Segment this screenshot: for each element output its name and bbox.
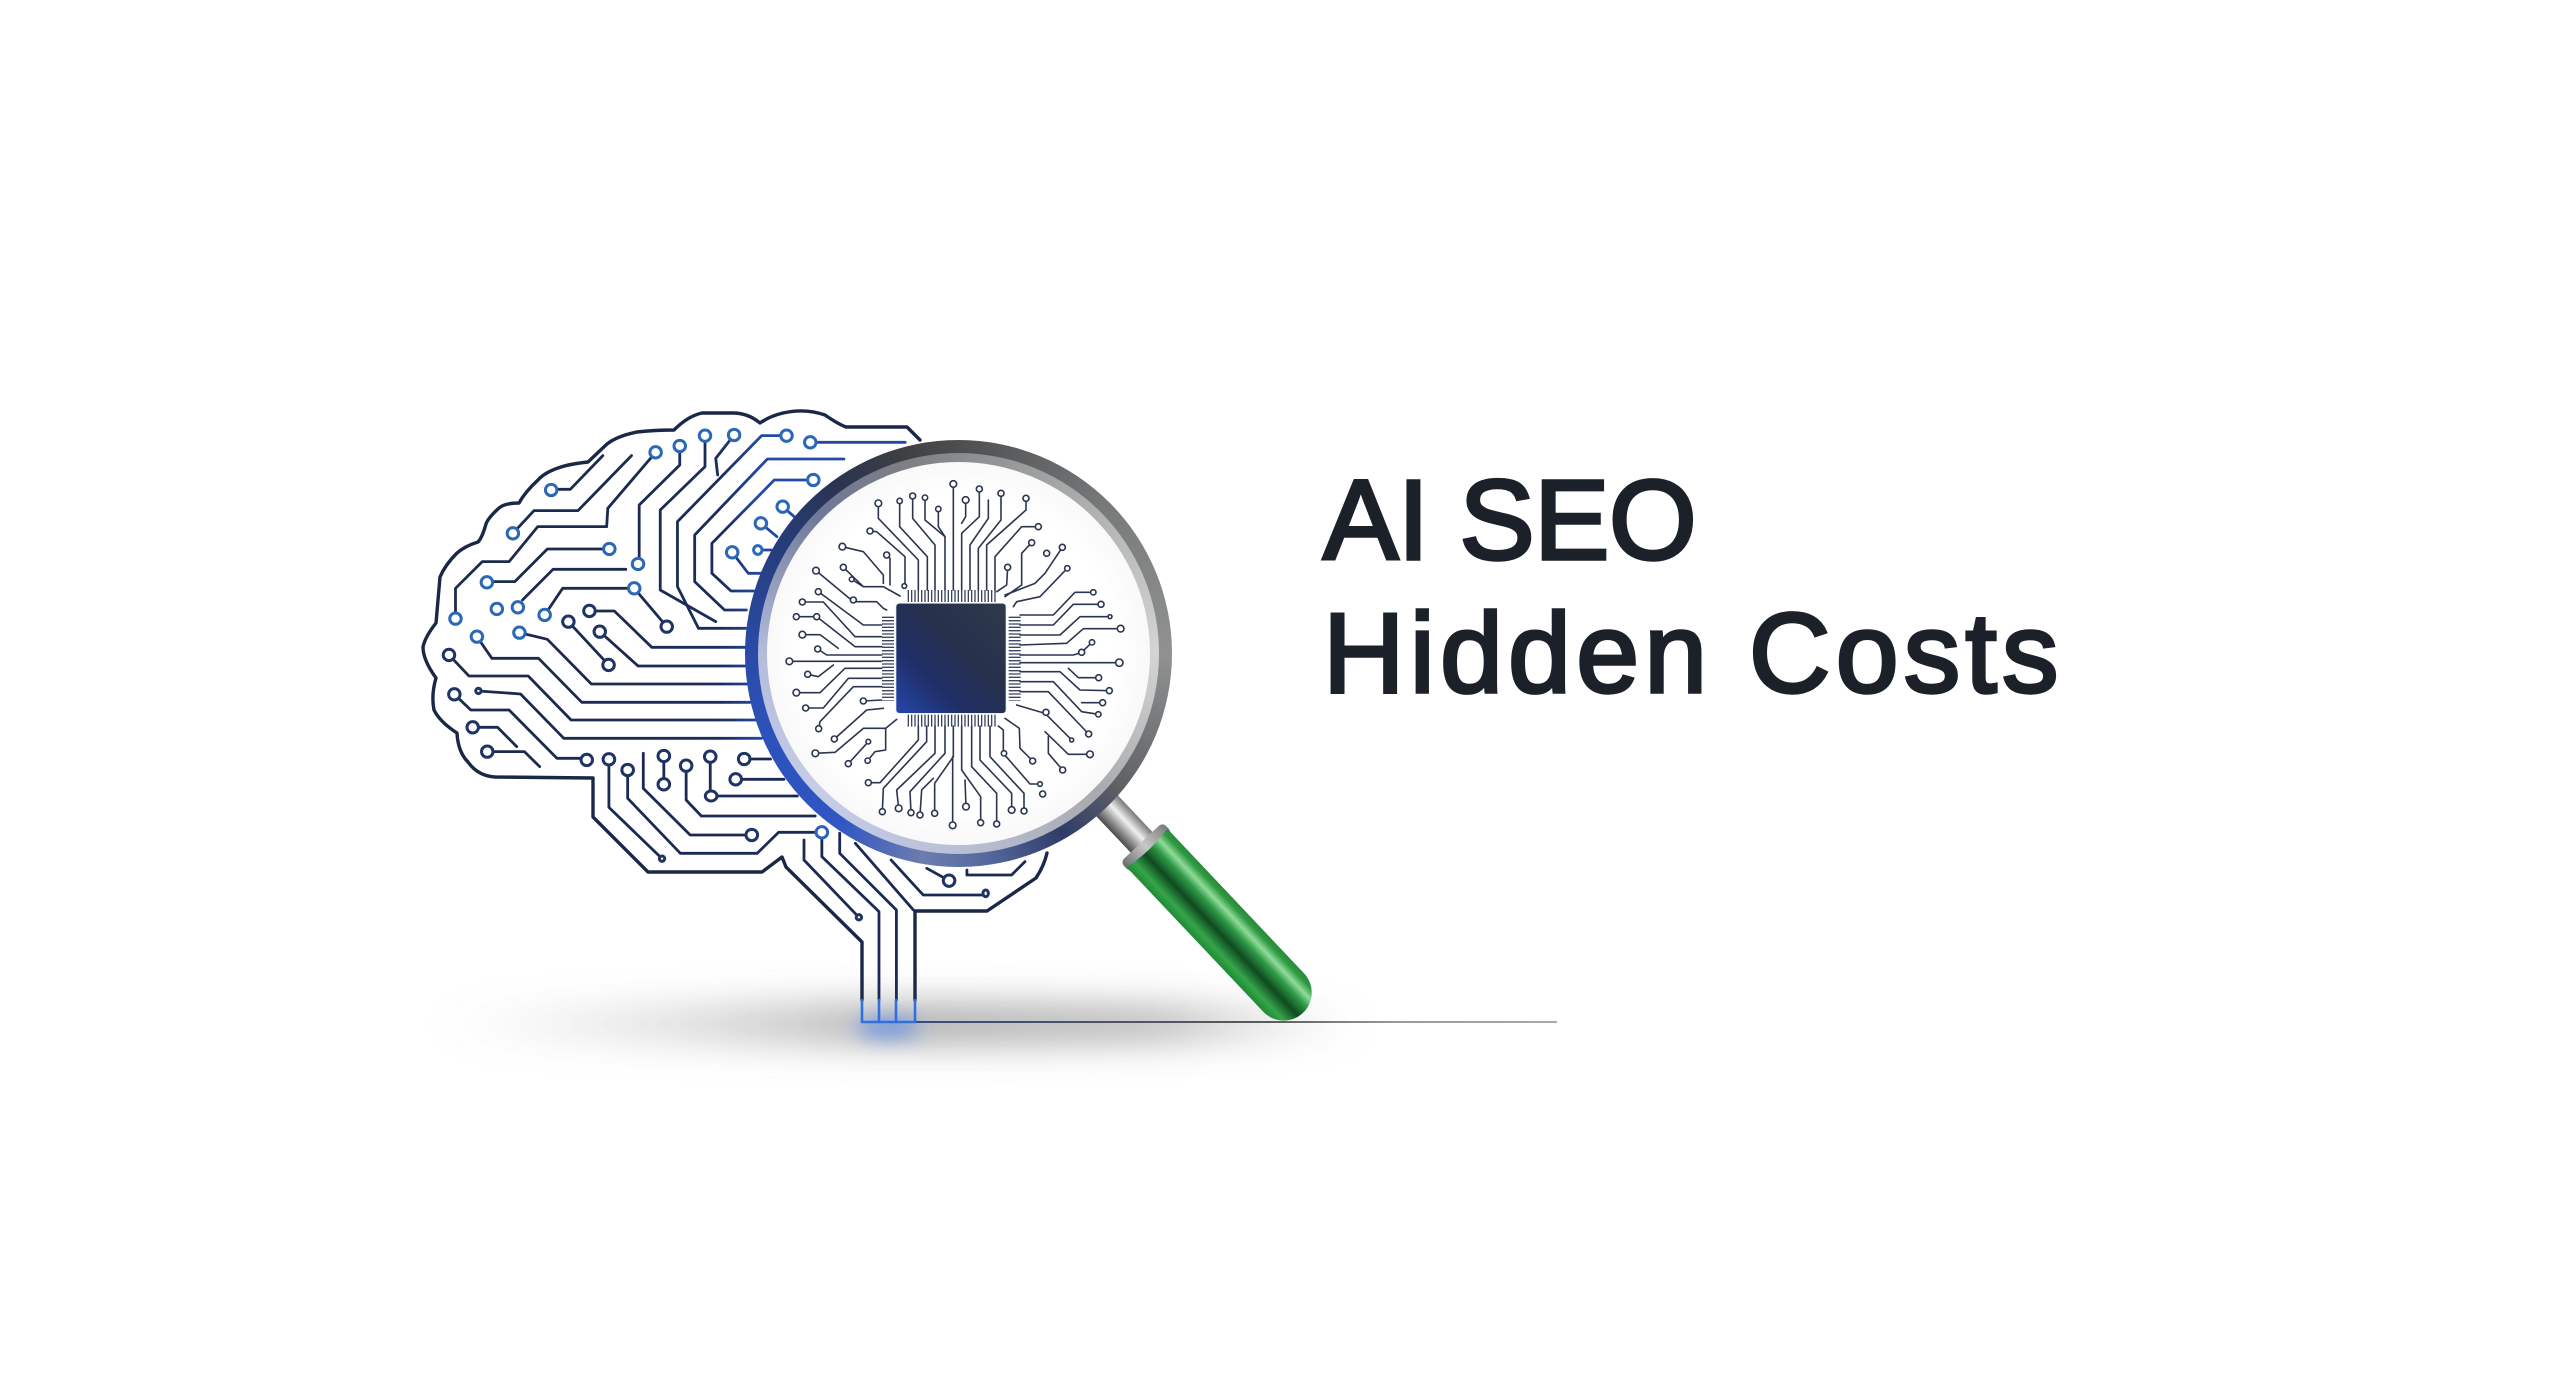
ground shadow and floor line	[539, 982, 1557, 1066]
navy circuit nodes	[443, 605, 672, 766]
glowing stem base	[862, 1000, 915, 1022]
green grip	[1127, 829, 1323, 1032]
blue circuit nodes	[450, 429, 819, 642]
upper brain traces	[443, 429, 905, 767]
title line 2: Hidden Costs	[1323, 590, 2064, 716]
chip pins	[888, 596, 1015, 721]
metal neck	[1088, 787, 1155, 855]
lens bevel	[758, 453, 1159, 854]
magnifying glass	[745, 440, 1312, 1021]
blue lower node	[816, 827, 828, 838]
lens rim	[745, 440, 1172, 867]
brain outline	[423, 411, 1047, 1000]
radial traces	[789, 484, 1121, 825]
handle	[1096, 796, 1312, 1021]
title line 1: AI SEO	[1323, 457, 1696, 583]
trace end nodes	[786, 481, 1124, 829]
chip and radial circuit inside lens	[785, 480, 1125, 830]
lens glass	[767, 462, 1150, 845]
processor chip	[896, 603, 1006, 713]
brain circuit outline and traces	[421, 409, 1049, 1024]
grey collar	[1120, 822, 1172, 872]
lower circuit nodes	[603, 750, 988, 920]
lower brain traces and stem	[603, 750, 1025, 1000]
title	[1320, 457, 2064, 716]
